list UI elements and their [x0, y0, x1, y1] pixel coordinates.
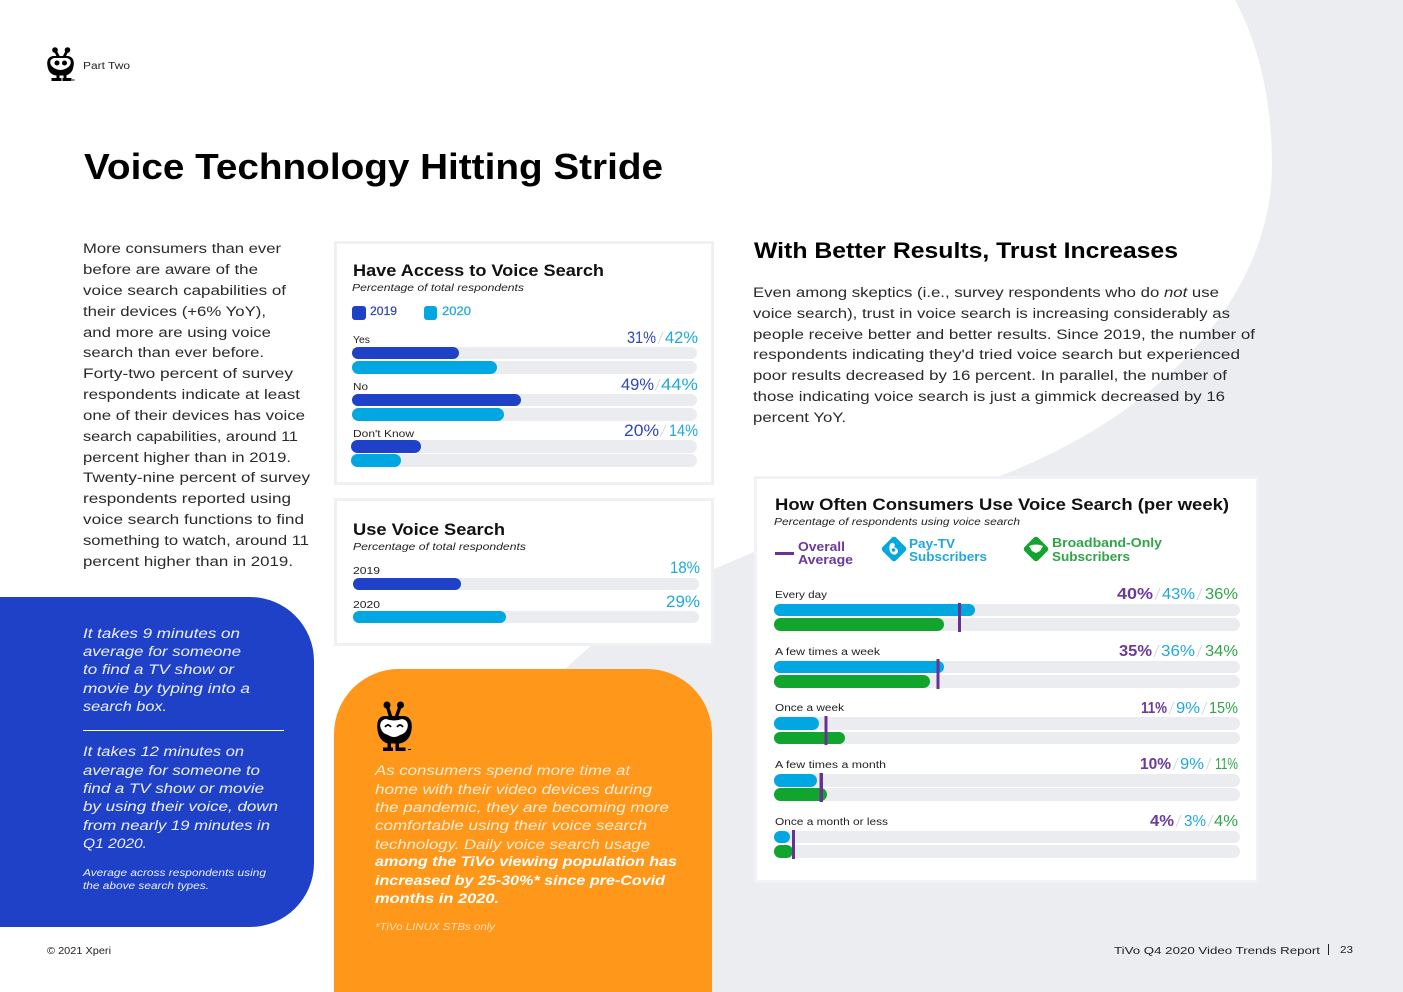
text: voice time: It takes 12 minutes on [83, 744, 244, 759]
text: voice time: Q1 2020. [83, 836, 147, 851]
text: callout body: home with their video devices during [375, 782, 653, 797]
text block: intro: percent higher than in 2019. [83, 450, 291, 465]
text block: trust: Even among skeptics (i.e., survey respondents who do not use [753, 285, 1219, 300]
text: typing time: movie by typing into a [83, 681, 251, 696]
text: typing time: search box. [83, 699, 167, 714]
bar: 2019: 18% [670, 559, 700, 577]
bar group: yes: 42% [665, 329, 698, 347]
bar group: a few times a month: 9% [1180, 756, 1204, 773]
heading: Use Voice Search [353, 520, 505, 539]
panel: orange callout [334, 669, 712, 992]
text: callout body: among the TiVo viewing population has [375, 854, 678, 869]
text block: trust: voice search), trust in voice search is increasing considerably as [753, 306, 1230, 321]
icon: happy mascot [377, 702, 412, 751]
text block: intro: More consumers than ever [83, 241, 282, 256]
icon: mascot [47, 47, 74, 81]
text block: intro: voice search functions to find [83, 512, 304, 527]
footnote: *TiVo LINUX STBs only [375, 922, 496, 933]
bar group: once a week: 9% [1176, 700, 1200, 717]
bar group: a few times a week: 36% [1161, 643, 1195, 660]
bar group: yes: 31% [627, 329, 656, 347]
text block: intro: Twenty-nine percent of survey [83, 470, 310, 485]
text block: intro: something to watch, around 11 [83, 533, 309, 548]
text block: intro: respondents indicate at least [83, 387, 300, 402]
bar group: once a month or less [774, 813, 1240, 859]
bar group: yes [352, 329, 698, 374]
bar group: once a month or less: 4% [1150, 813, 1174, 830]
bar group: once a month or less: Once a month or less [775, 817, 888, 828]
bar group: a few times a week [774, 643, 1240, 689]
text block: intro: one of their devices has voice [83, 408, 305, 423]
subheading: Percentage of total respondents [352, 283, 524, 294]
bar group: don't know [351, 422, 698, 467]
title: Voice Technology Hitting Stride [84, 146, 663, 187]
legend: overall average [775, 539, 853, 567]
bar group: don't know: 14% [669, 422, 698, 440]
subheading: Percentage of total respondents [353, 542, 526, 553]
bar group: a few times a month: A few times a month [775, 760, 886, 771]
heading: trust increases: With Better Results, Trust Increases [754, 238, 1178, 263]
text block: trust [753, 285, 1255, 425]
panel: how often consumers use voice search [756, 478, 1258, 882]
bar group: every day [774, 586, 1240, 632]
panel: have access to voice search [336, 242, 712, 484]
text: voice time: from nearly 19 minutes in [83, 818, 270, 833]
bar group: a few times a week: A few times a week [775, 647, 881, 658]
bar: 2019 [353, 559, 700, 590]
bar group: yes: Yes [353, 335, 370, 346]
text: voice time: average for someone to [83, 763, 261, 778]
footer: report title and page number: 23 [1340, 944, 1353, 956]
bar group: every day: 40% [1117, 586, 1153, 603]
background shape [334, 0, 1403, 992]
footnote: the above search types. [83, 881, 209, 892]
text block: intro [83, 241, 310, 569]
text block: trust: people receive better and better results. Since 2019, the number of [753, 327, 1255, 342]
bar group: a few times a week: 35% [1119, 643, 1152, 660]
panel: use voice search [336, 500, 712, 644]
bar group: once a week: 15% [1209, 700, 1238, 717]
section label: Part Two [83, 61, 131, 72]
footer: report title and page number: TiVo Q4 2020 Video Trends Report [1114, 945, 1320, 957]
bar group: no: 49% [621, 376, 654, 394]
legend: 2020 [442, 306, 471, 318]
legend: pay-tv [881, 536, 987, 564]
text: typing time [83, 626, 251, 714]
bar group: every day: 43% [1162, 586, 1195, 603]
text: callout body [374, 763, 678, 906]
bar group: no [352, 376, 698, 421]
heading: Have Access to Voice Search [353, 261, 604, 280]
text: voice time: by using their voice, down [83, 799, 278, 814]
heading: How Often Consumers Use Voice Search (per week) [775, 495, 1229, 514]
bar group: once a week: 11% [1141, 700, 1167, 717]
bar group: once a week: Once a week [775, 703, 845, 714]
bar group: a few times a month: 10% [1140, 756, 1171, 773]
text: typing time: It takes 9 minutes on [83, 626, 240, 641]
bar group: don't know: Don't Know [353, 429, 415, 440]
legend: pay-tv: Subscribers [909, 549, 987, 564]
text block: intro: and more are using voice [83, 325, 271, 340]
bar group: a few times a month [774, 756, 1240, 802]
bar group: once a week [774, 700, 1240, 745]
text: callout body: the pandemic, they are becoming more [375, 800, 669, 815]
bar group: a few times a month: 11% [1215, 756, 1238, 773]
text: callout body: As consumers spend more time at [374, 763, 632, 778]
legend: broadband-only: Subscribers [1052, 549, 1130, 564]
bar group: every day: 36% [1205, 586, 1238, 603]
legend [352, 306, 471, 320]
section marker: mascot and Part Two [47, 47, 131, 81]
text: voice time [83, 744, 278, 851]
bar group: no: No [353, 382, 368, 393]
bar group: a few times a week: 34% [1205, 643, 1238, 660]
panel: search time callout [0, 597, 314, 927]
bar group: don't know: 20% [624, 422, 659, 440]
footnote [82, 868, 267, 892]
text block: intro: their devices (+6% YoY), [83, 304, 266, 319]
text block: intro: search than ever before. [83, 345, 264, 360]
legend: overall average: Average [798, 552, 853, 567]
footer: report title and page number [1114, 944, 1353, 957]
text block: trust: poor results decreased by 16 percent. In parallel, the number of [753, 368, 1227, 383]
legend: overall average: Overall [798, 539, 845, 554]
bar group: no: 44% [661, 376, 698, 394]
text block: trust: those indicating voice search is just a gimmick decreased by 16 [753, 389, 1225, 404]
text block: intro: voice search capabilities of [83, 283, 286, 298]
footnote: Average across respondents using [82, 868, 267, 879]
legend: broadband-only: Broadband-Only [1052, 535, 1163, 550]
subheading: Percentage of respondents using voice search [774, 517, 1021, 528]
text block: intro: before are aware of the [83, 262, 258, 277]
legend: 2019 [370, 306, 397, 318]
text block: intro: Forty-two percent of survey [83, 366, 293, 381]
text: callout body: months in 2020. [375, 891, 499, 906]
text block: intro: percent higher than in 2019. [83, 554, 293, 569]
text: callout body: technology. Daily voice search usage [375, 837, 650, 852]
bar: 2020: 29% [666, 593, 700, 611]
bar group: every day: Every day [775, 590, 827, 601]
bar: 2020: 2020 [353, 600, 381, 611]
text block: intro: respondents reported using [83, 491, 291, 506]
text: callout body: increased by 25-30%* since pre-Covid [375, 873, 666, 888]
legend: pay-tv: Pay-TV [909, 536, 955, 551]
text block: intro: search capabilities, around 11 [83, 429, 298, 444]
bar: 2019: 2019 [353, 566, 381, 577]
text: typing time: average for someone [83, 644, 241, 659]
text: callout body: comfortable using their voice search [375, 818, 647, 833]
bar group: once a month or less: 3% [1184, 813, 1206, 830]
text block: trust: percent YoY. [753, 410, 846, 425]
bar: 2020 [353, 593, 700, 623]
legend: broadband-only [1023, 535, 1163, 564]
text block: trust: respondents indicating they'd tried voice search but experienced [753, 347, 1240, 362]
footer: copyright: © 2021 Xperi [47, 946, 111, 957]
text: typing time: to find a TV show or [83, 662, 235, 677]
text: voice time: find a TV show or movie [83, 781, 264, 796]
bar group: once a month or less: 4% [1214, 813, 1238, 830]
